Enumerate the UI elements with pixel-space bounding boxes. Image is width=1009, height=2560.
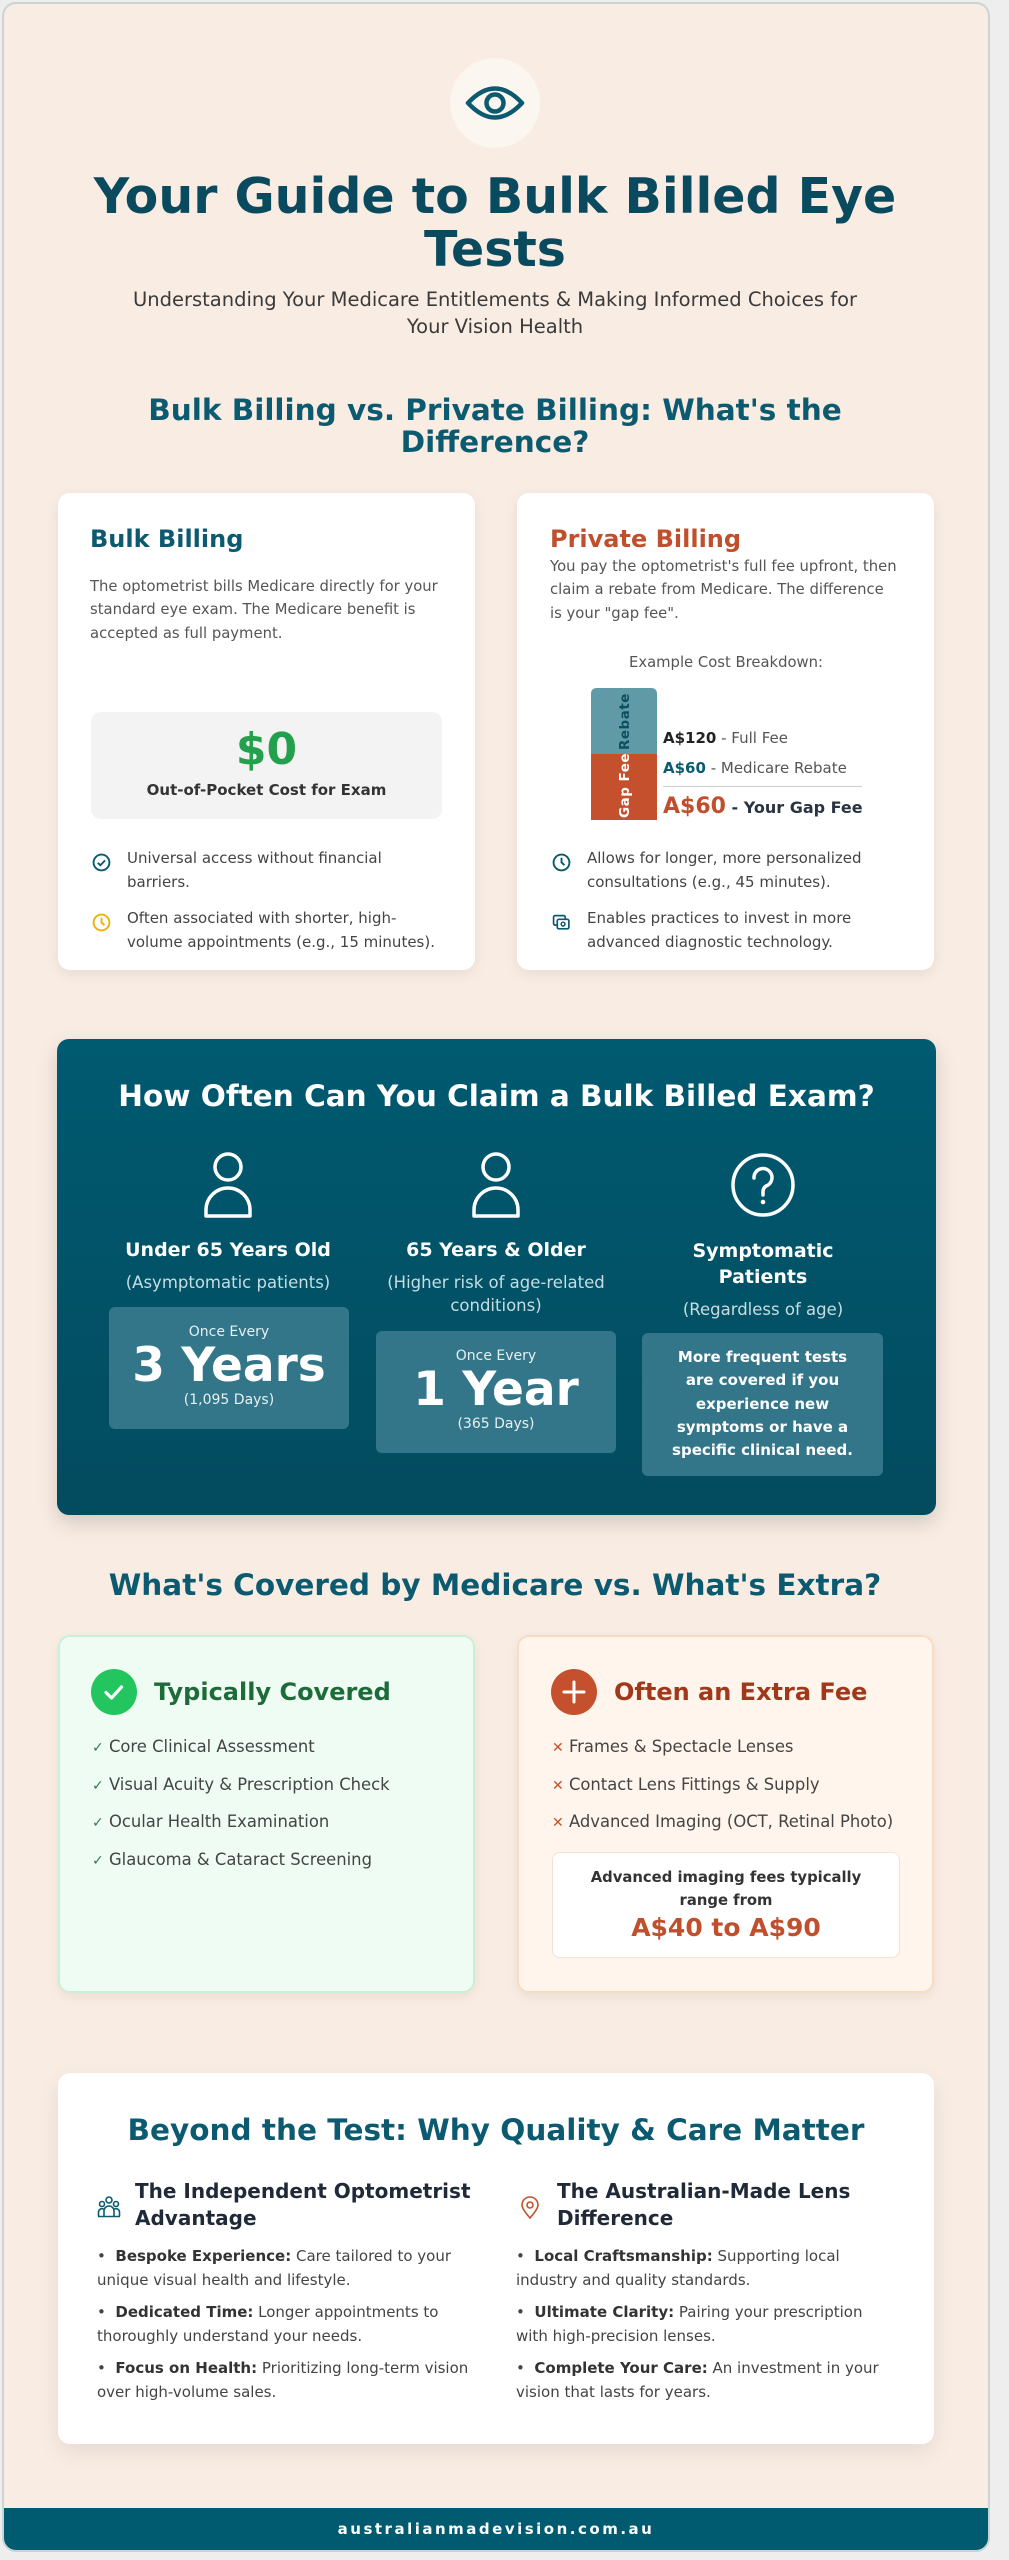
box: 3 years: [109, 1307, 349, 1429]
column 1 text: (Asymptomatic patients): [126, 1273, 330, 1292]
independent list: [97, 2247, 468, 2400]
bulk benefit text 1: [127, 849, 382, 891]
private benefit text 1: [587, 849, 862, 891]
extra list: ✕ Frames & Spectacle Lenses: [552, 1737, 793, 1756]
independent list: • Dedicated Time: Longer appointments to: [97, 2303, 438, 2321]
subtitle: [133, 288, 857, 338]
panel: beyond the test: [58, 2073, 934, 2444]
australian-made list: • Local Craftsmanship: Supporting local: [516, 2247, 840, 2265]
icon: people: [98, 2196, 120, 2218]
box: 1 year: Once Every: [456, 1348, 536, 1364]
icon: clock teal: [552, 854, 570, 872]
footer: australianmadevision.com.au: [338, 2520, 654, 2538]
column 2 text: 65 Years & Older: [406, 1239, 586, 1261]
zero cost box: Out-of-Pocket Cost for Exam: [147, 781, 386, 799]
subtitle: Your Vision Health: [407, 315, 583, 338]
full fee label: A$120 - Full Fee: [663, 729, 788, 747]
icon: question: [731, 1153, 795, 1217]
box: 3 years: Once Every: [189, 1324, 269, 1340]
covered list: ✓ Ocular Health Examination: [92, 1812, 329, 1831]
australian-made list: industry and quality standards.: [516, 2270, 750, 2288]
covered list: ✓ Glaucoma & Cataract Screening: [92, 1850, 372, 1868]
box: symptomatic: More frequent tests: [678, 1348, 847, 1366]
panel: how often: [57, 1039, 936, 1515]
title: [93, 168, 896, 278]
title: Tests: [424, 221, 566, 278]
icon: person 1: [204, 1152, 252, 1218]
callout: imaging price: [552, 1852, 900, 1958]
column 2 text: [387, 1239, 605, 1315]
private billing description: is your "gap fee".: [550, 605, 679, 622]
private billing description: claim a rebate from Medicare. The difference: [550, 581, 884, 598]
australian-made list: with high-precision lenses.: [516, 2326, 716, 2344]
bulk benefit text 1: barriers.: [127, 873, 190, 891]
independent list: unique visual health and lifestyle.: [97, 2270, 351, 2288]
box: 1 year: 1 Year: [413, 1362, 579, 1417]
australian-made heading: Difference: [557, 2206, 673, 2230]
icon: check circle: [92, 854, 110, 872]
private benefit text 2: advanced diagnostic technology.: [587, 933, 833, 951]
title: Your Guide to Bulk Billed Eye: [94, 168, 896, 225]
heading: covered vs extra: What's Covered by Medicare vs. What's Extra?: [109, 1568, 881, 1602]
column 2 text: (Higher risk of age-related: [387, 1273, 605, 1292]
box: 3 years: (1,095 Days): [184, 1392, 274, 1408]
column 3 text: (Regardless of age): [683, 1300, 843, 1319]
box: symptomatic: experience new: [696, 1395, 829, 1413]
box: symptomatic: are covered if you: [686, 1371, 839, 1389]
icon: green check: [91, 1669, 137, 1715]
covered title: Typically Covered: [154, 1678, 391, 1706]
independent list: thoroughly understand your needs.: [97, 2326, 362, 2344]
how often title: How Often Can You Claim a Bulk Billed Exam?: [118, 1079, 875, 1113]
heading: bulk vs private: [148, 393, 842, 459]
subtitle: Understanding Your Medicare Entitlements & Making Informed Choices for: [133, 288, 857, 311]
bar chart: cost breakdown: Rebate: [617, 693, 633, 750]
covered list: ✓ Core Clinical Assessment: [92, 1737, 315, 1756]
panel: private billing: [517, 493, 934, 970]
panel: bulk billing: [58, 493, 475, 970]
gap fee label: A$60 - Your Gap Fee: [663, 794, 863, 819]
australian-made heading: The Australian-Made Lens: [557, 2179, 850, 2203]
extra list: ✕ Advanced Imaging (OCT, Retinal Photo): [552, 1812, 893, 1831]
box: symptomatic: symptoms or have a: [677, 1418, 848, 1436]
independent optometrist heading: The Independent Optometrist: [135, 2179, 470, 2203]
icon: person 2: [472, 1152, 520, 1218]
bulk benefit text 1: Universal access without financial: [127, 849, 382, 867]
independent list: • Focus on Health: Prioritizing long-term vision: [97, 2359, 468, 2377]
bulk billing description: The optometrist bills Medicare directly for your: [90, 578, 438, 595]
australian-made heading: [557, 2179, 850, 2230]
private billing title: Private Billing: [550, 525, 741, 553]
extra title: Often an Extra Fee: [614, 1678, 867, 1706]
box: symptomatic: [642, 1333, 883, 1476]
beyond title: Beyond the Test: Why Quality & Care Matter: [128, 2113, 864, 2147]
bulk billing description: [90, 578, 438, 642]
australian-made list: • Ultimate Clarity: Pairing your prescription: [516, 2303, 862, 2321]
icon: clock yellow: [92, 914, 110, 932]
independent optometrist heading: [135, 2179, 470, 2230]
rebate label: A$60 - Medicare Rebate: [663, 759, 847, 777]
bar chart: cost breakdown: [591, 688, 657, 820]
callout: imaging price: A$40 to A$90: [631, 1913, 821, 1942]
heading: bulk vs private: Difference?: [401, 425, 589, 459]
covered list: [92, 1737, 390, 1868]
independent list: • Bespoke Experience: Care tailored to your: [97, 2247, 451, 2265]
column 3 text: Symptomatic: [692, 1240, 834, 1262]
private benefit text 2: Enables practices to invest in more: [587, 909, 851, 927]
private benefit text 1: consultations (e.g., 45 minutes).: [587, 873, 831, 891]
australian-made list: [516, 2247, 879, 2400]
bulk benefit text 2: volume appointments (e.g., 15 minutes).: [127, 933, 435, 951]
zero cost box: [91, 712, 442, 819]
icon: eye: [450, 58, 540, 148]
icon: money: [552, 914, 570, 930]
private benefit text 1: Allows for longer, more personalized: [587, 849, 862, 867]
bulk benefit text 2: [127, 909, 435, 951]
example cost breakdown label: Example Cost Breakdown:: [629, 654, 823, 671]
bulk billing description: standard eye exam. The Medicare benefit is: [90, 601, 415, 618]
column 3 text: [683, 1240, 843, 1319]
bulk billing description: accepted as full payment.: [90, 625, 282, 642]
covered list: ✓ Visual Acuity & Prescription Check: [92, 1774, 390, 1794]
private billing description: You pay the optometrist's full fee upfront, then: [550, 558, 897, 575]
panel: typically covered: [58, 1635, 475, 1993]
australian-made list: • Complete Your Care: An investment in your: [516, 2359, 879, 2377]
callout: imaging price: Advanced imaging fees typically: [591, 1869, 861, 1886]
icon: location pin: [521, 2196, 539, 2220]
panel: extra fee: [517, 1635, 934, 1993]
australian-made list: vision that lasts for years.: [516, 2382, 711, 2400]
private billing description: [550, 558, 897, 622]
box: symptomatic: specific clinical need.: [672, 1441, 853, 1459]
callout: imaging price: range from: [680, 1892, 772, 1909]
independent list: over high-volume sales.: [97, 2382, 276, 2400]
column 1 text: [125, 1239, 331, 1292]
box: 1 year: [376, 1331, 616, 1453]
column 1 text: Under 65 Years Old: [125, 1239, 331, 1261]
box: 1 year: (365 Days): [457, 1416, 535, 1432]
independent optometrist heading: Advantage: [135, 2206, 257, 2230]
private benefit text 2: [587, 909, 851, 951]
column 2 text: conditions): [450, 1296, 542, 1315]
box: 3 years: 3 Years: [132, 1338, 326, 1393]
icon: plus: [551, 1669, 597, 1715]
bar chart: cost breakdown: Gap Fee: [617, 753, 633, 818]
extra list: [552, 1737, 893, 1831]
bulk billing title: Bulk Billing: [90, 525, 243, 553]
zero cost box: $0: [236, 724, 297, 775]
bulk benefit text 2: Often associated with shorter, high-: [127, 909, 396, 927]
column 3 text: Patients: [719, 1266, 807, 1288]
extra list: ✕ Contact Lens Fittings & Supply: [552, 1774, 820, 1794]
heading: bulk vs private: Bulk Billing vs. Private Billing: What's the: [148, 393, 842, 427]
footer: [4, 2508, 988, 2550]
